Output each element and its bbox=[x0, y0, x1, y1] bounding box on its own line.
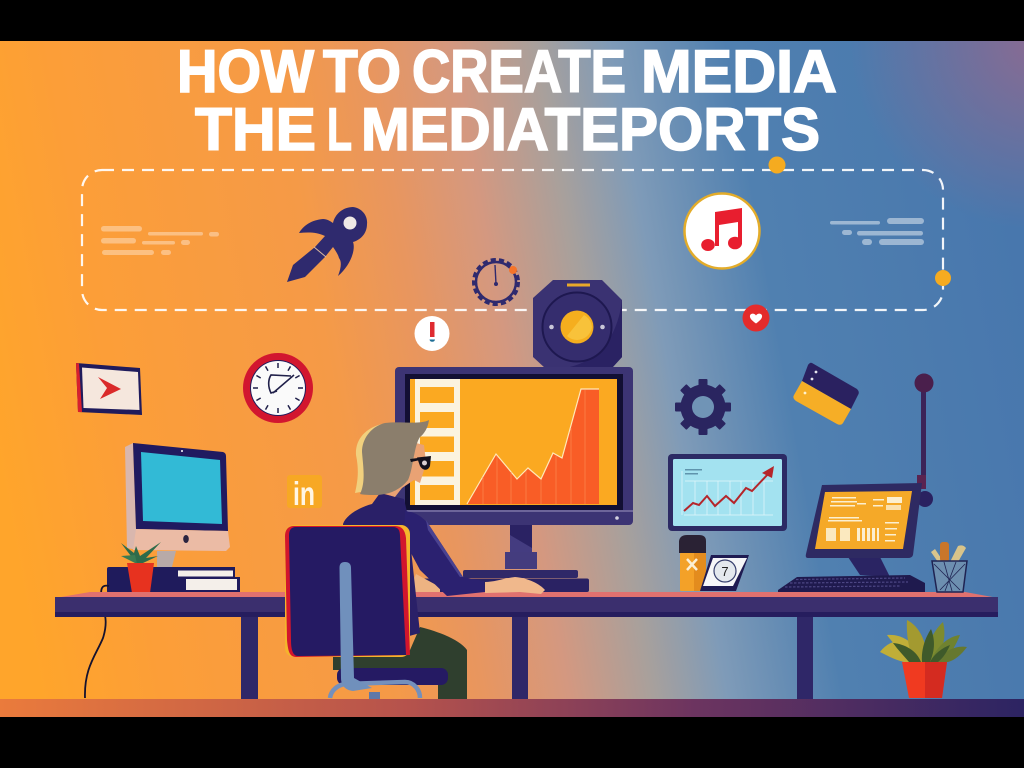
tablet clock: 7 bbox=[721, 564, 729, 579]
legs bbox=[333, 627, 467, 699]
title: HOW bbox=[177, 38, 314, 105]
title bbox=[177, 38, 837, 163]
title: TO bbox=[323, 38, 401, 105]
desk lamp bbox=[914, 374, 934, 507]
hand bbox=[485, 577, 545, 594]
icon: alert badge bbox=[414, 316, 450, 351]
right computer bbox=[778, 483, 925, 592]
chair back bbox=[285, 525, 410, 657]
title: THE bbox=[195, 96, 316, 163]
screen area chart bbox=[467, 389, 599, 504]
monitor body bbox=[395, 367, 633, 525]
monitor stand bbox=[420, 525, 589, 592]
screen bbox=[410, 379, 617, 505]
stand bbox=[848, 557, 890, 577]
title: MEDIATEPORTS bbox=[361, 96, 820, 163]
icon: tilted card bbox=[793, 363, 859, 425]
cable bbox=[85, 586, 109, 698]
floor strip bbox=[0, 699, 1024, 717]
forearm bbox=[404, 511, 485, 596]
title: L bbox=[327, 96, 352, 163]
icon: music note bbox=[684, 194, 760, 268]
person at desk bbox=[333, 420, 545, 699]
right placeholder text lines bbox=[830, 218, 924, 245]
icon: gear bbox=[675, 379, 731, 435]
chair base bbox=[330, 682, 420, 698]
desk legs bbox=[241, 617, 813, 699]
tablet clock bbox=[700, 555, 749, 591]
screen content bbox=[826, 497, 902, 542]
desk bbox=[55, 592, 998, 699]
main monitor bbox=[395, 367, 633, 592]
left placeholder text lines bbox=[101, 226, 219, 255]
neck and face bbox=[380, 442, 426, 497]
wall clock bbox=[243, 353, 313, 423]
monitor bbox=[806, 483, 922, 558]
left desktop computer bbox=[125, 443, 230, 567]
title: CREATE bbox=[412, 38, 626, 105]
icon: rocket pen bbox=[287, 207, 367, 282]
floor plant bbox=[880, 620, 967, 698]
coffee cup bbox=[679, 535, 706, 591]
camera / speaker unit bbox=[533, 280, 622, 368]
far arm bbox=[408, 574, 440, 592]
seat bbox=[337, 668, 448, 685]
icon: heart badge bbox=[742, 304, 770, 332]
floating chart monitor bbox=[668, 454, 787, 531]
pencil holder bbox=[931, 542, 967, 592]
leaves bbox=[880, 620, 967, 662]
small desk plant bbox=[121, 542, 161, 593]
pot bbox=[902, 662, 947, 698]
books bbox=[107, 567, 240, 593]
glasses bbox=[410, 456, 431, 470]
icon: stopwatch gear bbox=[474, 260, 518, 304]
chair pole bbox=[340, 562, 372, 691]
wall frame with red arrow bbox=[76, 363, 142, 415]
office chair bbox=[285, 525, 448, 699]
icon: linkedin badge: in bbox=[293, 475, 315, 512]
keyboard bbox=[778, 575, 925, 592]
hair bbox=[355, 420, 429, 495]
title: MEDIA bbox=[641, 38, 837, 105]
torso bbox=[343, 493, 420, 640]
dashed process frame bbox=[82, 156, 951, 310]
screen sidebar bbox=[415, 379, 460, 505]
